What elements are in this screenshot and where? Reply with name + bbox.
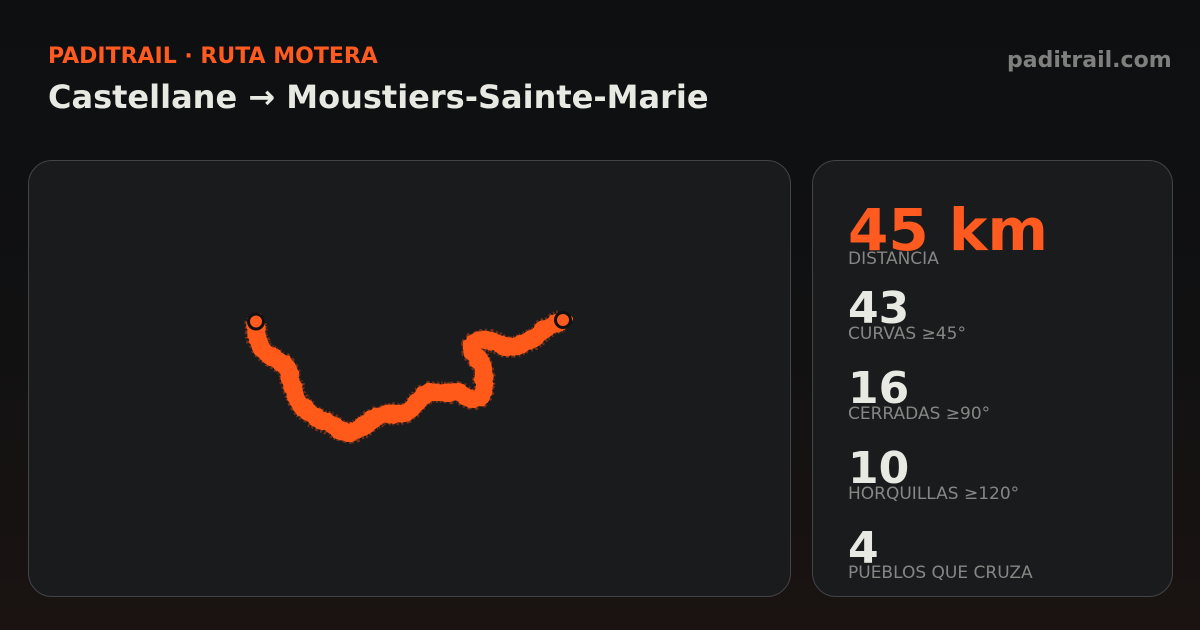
stat: hairpins: 10 [848, 443, 909, 494]
start marker [248, 314, 264, 329]
brand url: paditrail.com [1007, 48, 1172, 73]
stat label: hairpins: HORQUILLAS ≥120° [848, 484, 1019, 504]
stat: curves: 43 [848, 283, 909, 334]
route line [256, 320, 563, 433]
stat label: distance: DISTANCIA [848, 249, 939, 269]
end marker [556, 312, 570, 328]
panel: stats [812, 160, 1173, 597]
eyebrow heading: PADITRAIL · RUTA MOTERA [48, 44, 378, 69]
title: Castellane → Moustiers-Sainte-Marie [48, 78, 709, 116]
stat label: tight curves: CERRADAS ≥90° [848, 404, 990, 424]
panel: map [28, 160, 791, 597]
stat label: villages: PUEBLOS QUE CRUZA [848, 563, 1033, 583]
stat: distance: 45 km [848, 196, 1048, 264]
stat: villages: 4 [848, 523, 879, 574]
stat label: curves: CURVAS ≥45° [848, 324, 966, 344]
stat: tight curves: 16 [848, 363, 909, 414]
